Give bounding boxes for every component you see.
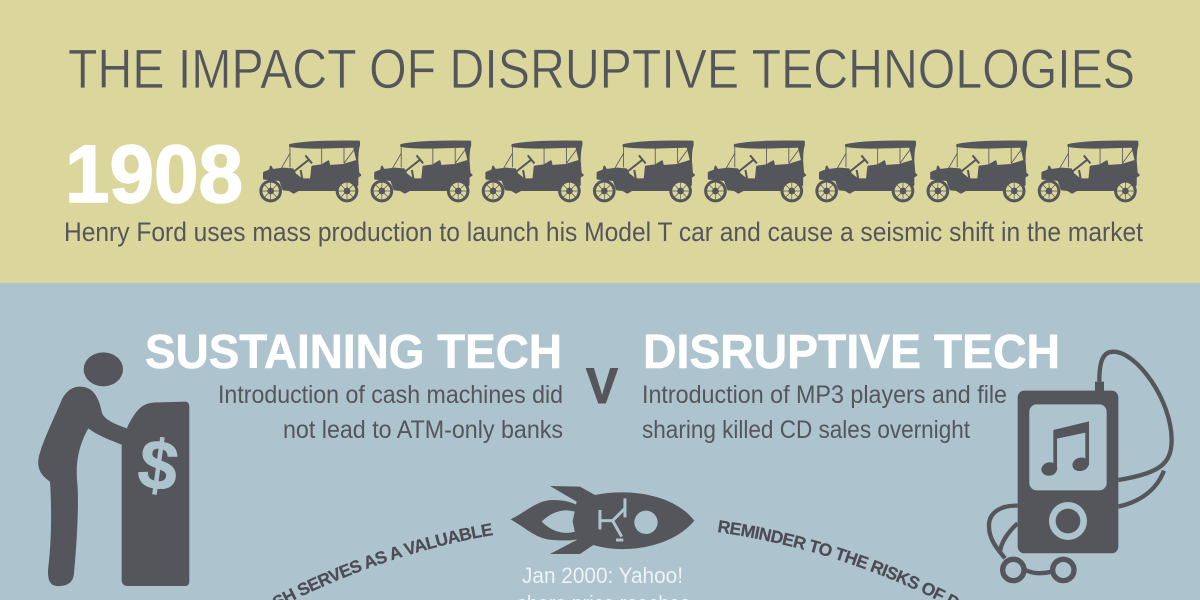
caption: Yahoo share price	[517, 563, 690, 600]
versus letter: V	[586, 358, 619, 414]
icon: MP3 player with earphones	[989, 352, 1172, 581]
panel: 1908 header	[0, 0, 1200, 283]
text: disruptive description: sharing killed CD sales overnight	[642, 416, 970, 444]
text: sustaining description: Introduction of cash machines did	[218, 381, 563, 409]
heading: sustaining tech: SUSTAINING TECH	[145, 326, 562, 379]
year 1908: 1908	[65, 129, 243, 220]
icon: rocket	[511, 486, 694, 554]
text: sustaining description	[218, 381, 563, 444]
text: disruptive description: Introduction of MP3 players and file	[642, 381, 1007, 409]
icon: person at cash machine	[38, 352, 189, 586]
heading: disruptive tech: DISRUPTIVE TECH	[643, 326, 1060, 379]
icon: person at cash machine: $	[134, 424, 183, 507]
icon row: Model T cars	[259, 142, 1139, 202]
text: disruptive description	[642, 381, 1007, 444]
panel: sustaining versus disruptive	[38, 326, 1174, 600]
text: sustaining description: not lead to ATM-only banks	[283, 416, 563, 444]
caption: Yahoo share price: Jan 2000: Yahoo!	[522, 563, 683, 588]
